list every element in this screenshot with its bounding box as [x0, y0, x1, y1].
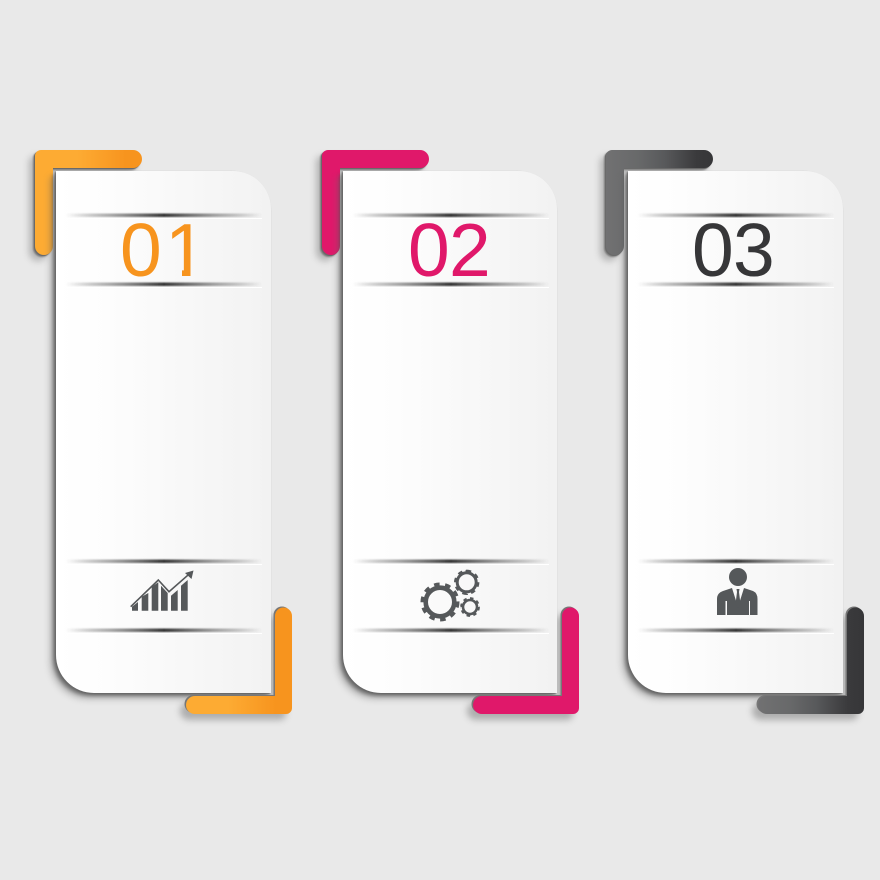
number 01: 01: [120, 208, 207, 292]
bracket: bottom right orange: [184, 606, 292, 714]
icon: rising bar chart: [131, 570, 194, 611]
card edge: [342, 172, 556, 694]
card body: [56, 171, 271, 693]
icon: three gears: [422, 571, 479, 620]
bracket: top left grey: [605, 150, 713, 256]
card body: [628, 171, 843, 693]
card shadow: [622, 174, 840, 699]
slot line below icon: [353, 628, 549, 634]
slot line above icon: [638, 560, 834, 565]
bracket: top left pink: [321, 150, 429, 256]
bracket shadow: top left orange: [29, 152, 140, 261]
card shadow: [50, 174, 268, 699]
panel: card 03: [600, 150, 864, 720]
slot line above icon: [353, 560, 549, 565]
slot line below icon: [638, 628, 834, 634]
bracket shadow: top left grey: [600, 152, 711, 261]
bracket shadow: bottom right orange: [180, 614, 286, 720]
bracket: top left orange: [34, 150, 142, 256]
bracket shadow: bottom right pink: [467, 614, 573, 720]
card shadow: [337, 174, 554, 699]
card edge: [627, 172, 842, 694]
slot line top: [66, 214, 262, 219]
slot line under number: [353, 282, 549, 288]
card body: [343, 171, 557, 693]
slot line under number: [66, 282, 262, 288]
slot line top: [638, 214, 834, 219]
slot line above icon: [66, 560, 262, 565]
card edge: [55, 172, 270, 694]
number 03: 03: [692, 208, 775, 292]
bracket shadow: bottom right grey: [752, 614, 858, 720]
bracket: bottom right pink: [472, 606, 579, 714]
slot line top: [353, 214, 549, 219]
slot line under number: [638, 282, 834, 288]
panel: card 01: [29, 150, 292, 720]
bracket shadow: top left pink: [316, 152, 427, 261]
number 02: 02: [408, 208, 491, 292]
slot line below icon: [66, 628, 262, 634]
bracket: bottom right grey: [756, 606, 864, 714]
icon: businessman: [717, 568, 758, 615]
panel: card 02: [316, 150, 579, 720]
